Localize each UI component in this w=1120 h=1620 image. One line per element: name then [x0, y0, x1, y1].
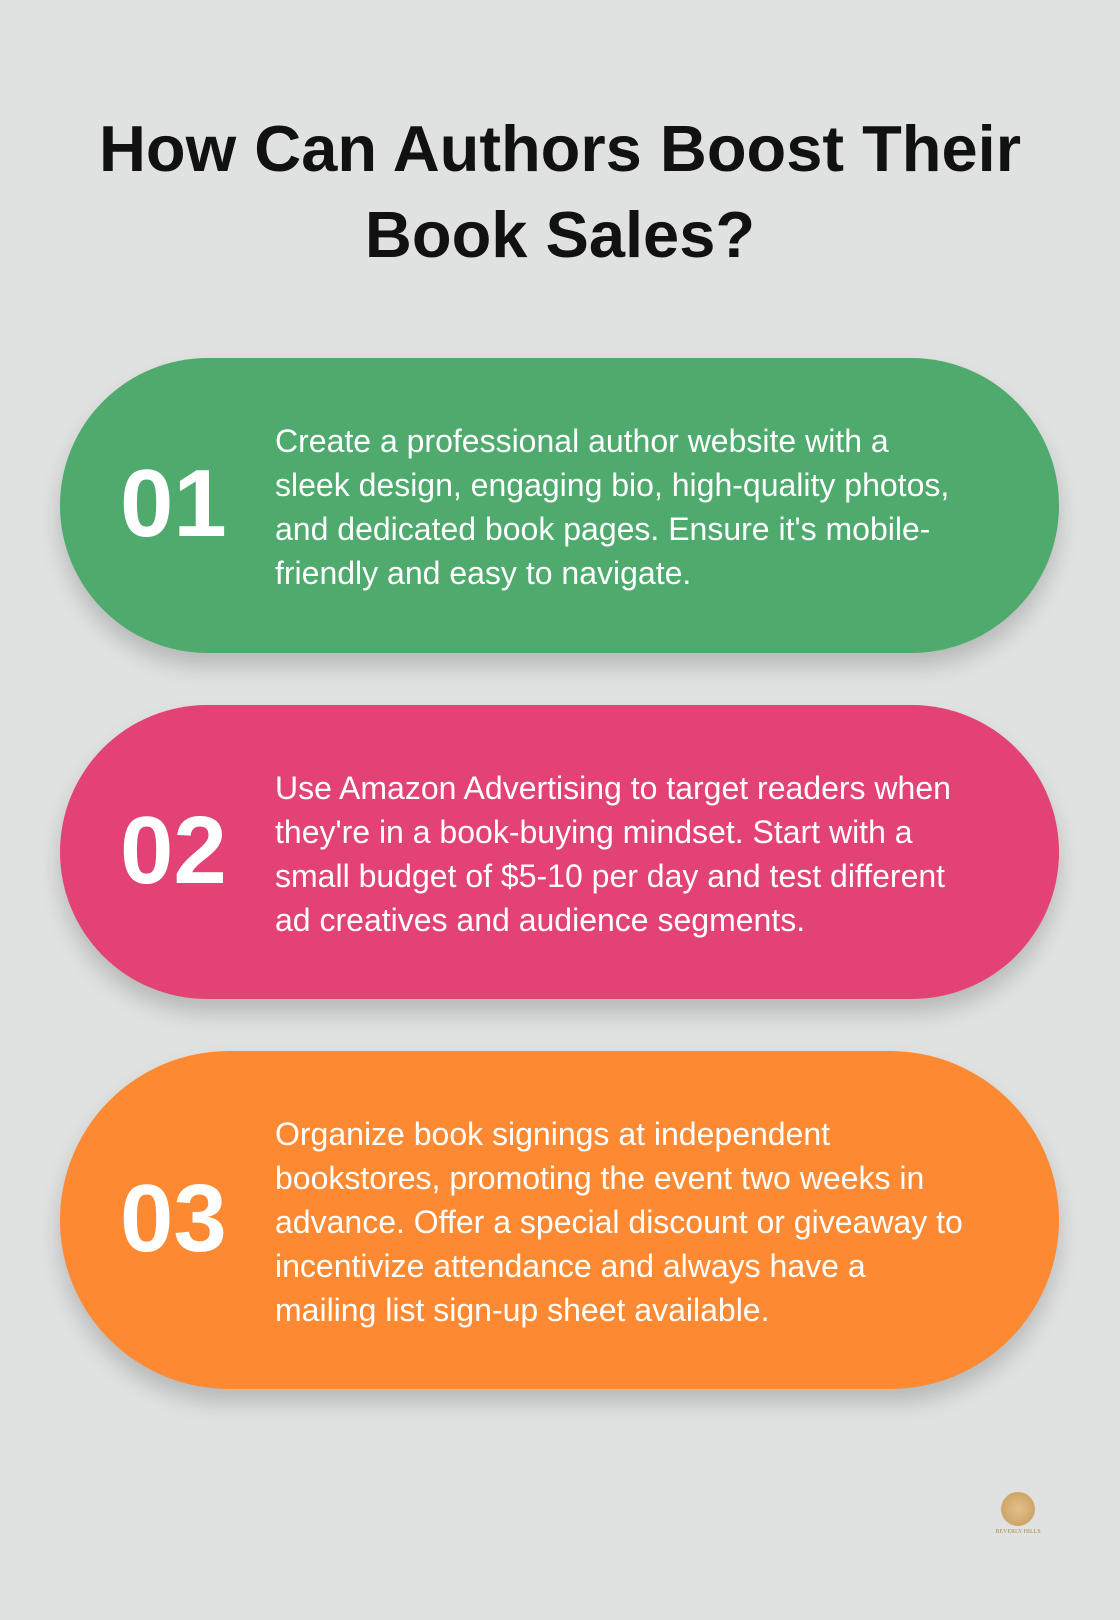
title: [99, 112, 1021, 271]
text 02: ad creatives and audience segments.: [275, 902, 805, 938]
panel: step 03: [60, 1051, 1059, 1389]
text 02: [275, 770, 951, 938]
text 03: advance. Offer a special discount or giveaway to: [275, 1204, 963, 1240]
text 01: [275, 423, 949, 591]
text 03: bookstores, promoting the event two weeks in: [275, 1160, 924, 1196]
text 02: they're in a book-buying mindset. Start with a: [275, 814, 913, 850]
title: Book Sales?: [365, 198, 755, 271]
text 03: [275, 1116, 963, 1328]
text 01: and dedicated book pages. Ensure it's mobile-: [275, 511, 930, 547]
text 01: friendly and easy to navigate.: [275, 555, 691, 591]
number 03: 03: [120, 1165, 227, 1272]
panel: step 01: [60, 358, 1059, 653]
text 02: small budget of $5-10 per day and test different: [275, 858, 945, 894]
text 03: incentivize attendance and always have a: [275, 1248, 866, 1284]
number 02: 02: [120, 797, 227, 904]
number 01: 01: [120, 450, 227, 557]
panel: step 02: [60, 705, 1059, 999]
text 01: sleek design, engaging bio, high-quality photos,: [275, 467, 949, 503]
logo: BEVERLY HILLS: [995, 1529, 1041, 1535]
title: How Can Authors Boost Their: [99, 112, 1021, 185]
text 03: mailing list sign-up sheet available.: [275, 1292, 769, 1328]
text 03: Organize book signings at independent: [275, 1116, 830, 1152]
logo: [995, 1492, 1041, 1535]
text 01: Create a professional author website with a: [275, 423, 889, 459]
text 02: Use Amazon Advertising to target readers when: [275, 770, 951, 806]
